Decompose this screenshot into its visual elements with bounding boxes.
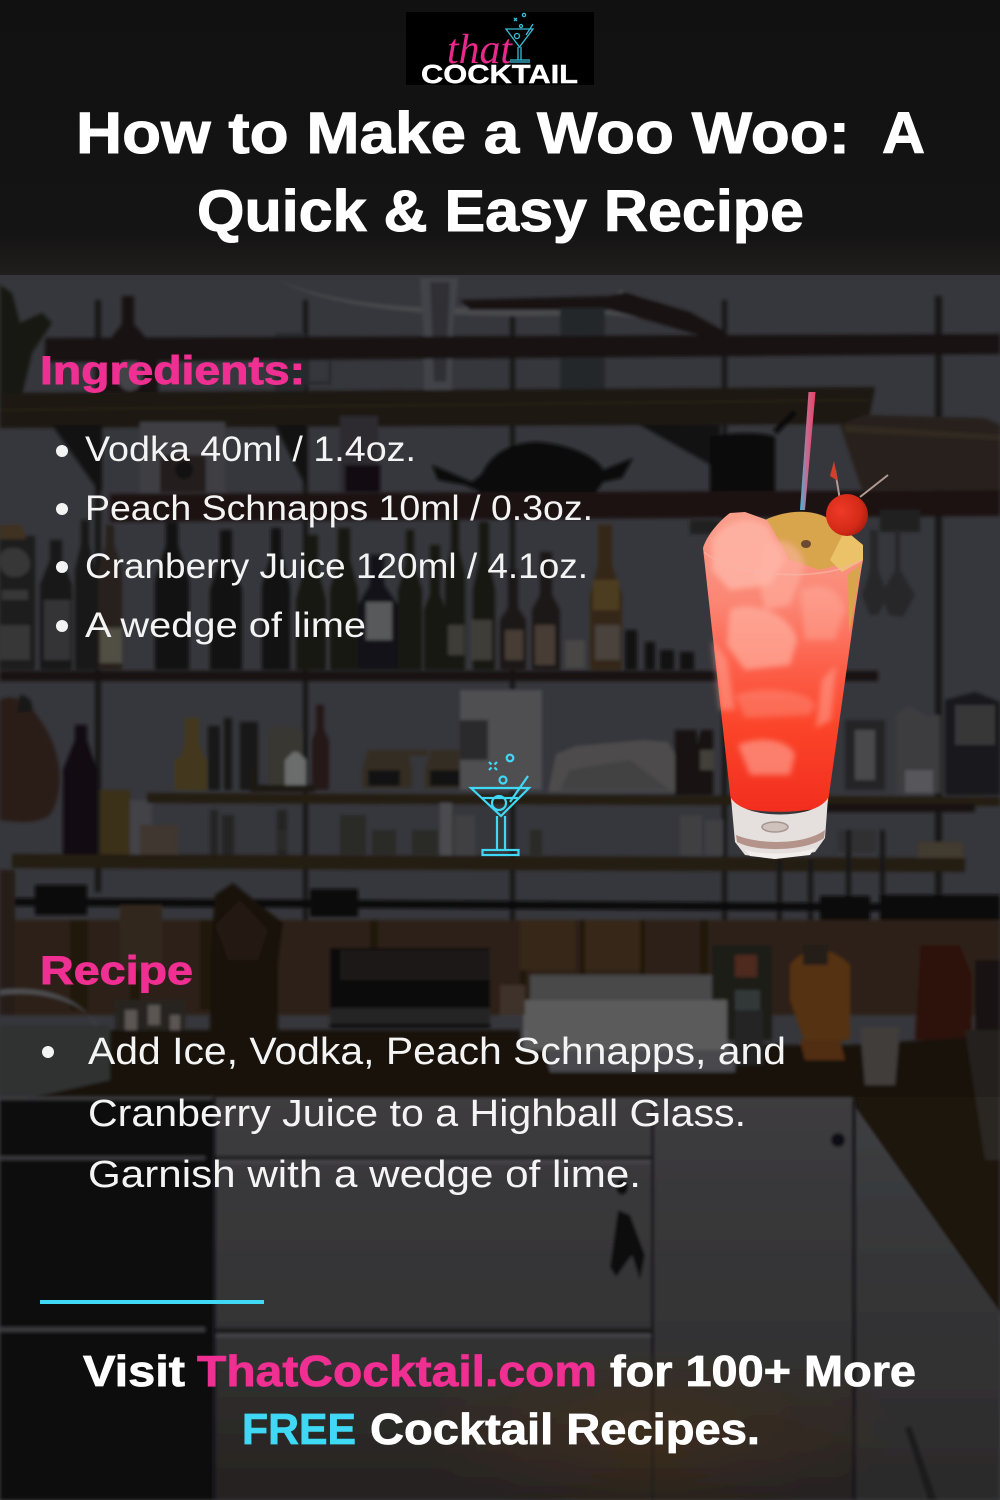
logo wordmark: COCKTAIL: COCKTAIL — [421, 59, 578, 89]
liquor bottles — [0, 536, 35, 670]
drink photo: woo woo highball — [703, 392, 888, 859]
glass rim — [704, 552, 862, 575]
sword on wall — [277, 279, 726, 340]
utensils hanging — [777, 830, 885, 980]
title — [76, 101, 925, 244]
fourth shelf — [0, 671, 878, 681]
title: How to Make a Woo Woo: — [76, 101, 850, 166]
rods — [95, 296, 942, 950]
shelf 855 — [12, 854, 965, 872]
hanging wine glasses — [862, 530, 915, 617]
recipe text: Garnish with a wedge of lime. — [88, 1154, 641, 1196]
shelf objects — [140, 422, 225, 492]
upper shelf — [45, 334, 1000, 362]
photo dimming overlay — [0, 275, 1000, 1097]
footer call to action: for 100+ More — [610, 1347, 916, 1396]
appliances on counter — [120, 905, 162, 970]
logo script: that: that — [447, 27, 513, 73]
footer call to action: ThatCocktail.com — [197, 1347, 597, 1396]
recipe text — [42, 1031, 786, 1196]
recipe text: Add Ice, Vodka, Peach Schnapps, and — [88, 1031, 786, 1073]
wood backsplash — [15, 920, 1000, 1015]
footer call to action: Visit — [83, 1347, 185, 1396]
footer call to action: FREE — [242, 1405, 356, 1454]
glassware — [420, 278, 458, 394]
title: A — [882, 101, 925, 166]
ingredients list: Vodka 40ml / 1.4oz. — [85, 430, 416, 469]
ice cubes — [712, 520, 845, 775]
shelf 793 — [147, 793, 1000, 806]
footer call to action — [83, 1347, 916, 1454]
ceiling band — [0, 0, 1000, 275]
ingredients list — [56, 430, 593, 645]
footer call to action: Cocktail Recipes. — [370, 1405, 760, 1454]
ingredients list: Cranberry Juice 120ml / 4.1oz. — [85, 547, 588, 586]
heading: ingredients: Ingredients: — [40, 349, 305, 393]
title: Quick & Easy Recipe — [197, 179, 804, 244]
lower shelf items — [0, 697, 60, 822]
logo icon: martini glass — [506, 13, 533, 62]
ingredients list: A wedge of lime — [85, 606, 366, 645]
divider line — [40, 1300, 264, 1304]
cherry — [826, 494, 868, 536]
counter top — [0, 1030, 1000, 1315]
left counter bits — [0, 989, 105, 1050]
recipe text: Cranberry Juice to a Highball Glass. — [88, 1093, 746, 1135]
logo — [406, 12, 594, 89]
ingredients list: Peach Schnapps 10ml / 0.3oz. — [85, 489, 593, 528]
keys in lock — [610, 1179, 645, 1280]
heading: recipe: Recipe — [40, 949, 193, 993]
shelf 855 objects — [210, 810, 287, 855]
glass with red liquid — [703, 512, 863, 812]
cherry pick — [835, 470, 888, 500]
third shelf — [110, 490, 1000, 522]
plant and top bottle — [0, 285, 52, 395]
icon: martini glass — [471, 755, 529, 855]
lime highlights — [830, 530, 863, 572]
rail — [15, 898, 1000, 912]
lime wedge — [765, 512, 863, 650]
long shelf with brackets — [0, 387, 875, 428]
cabinets — [215, 1097, 853, 1500]
straw — [800, 392, 816, 510]
glass base — [731, 798, 828, 859]
